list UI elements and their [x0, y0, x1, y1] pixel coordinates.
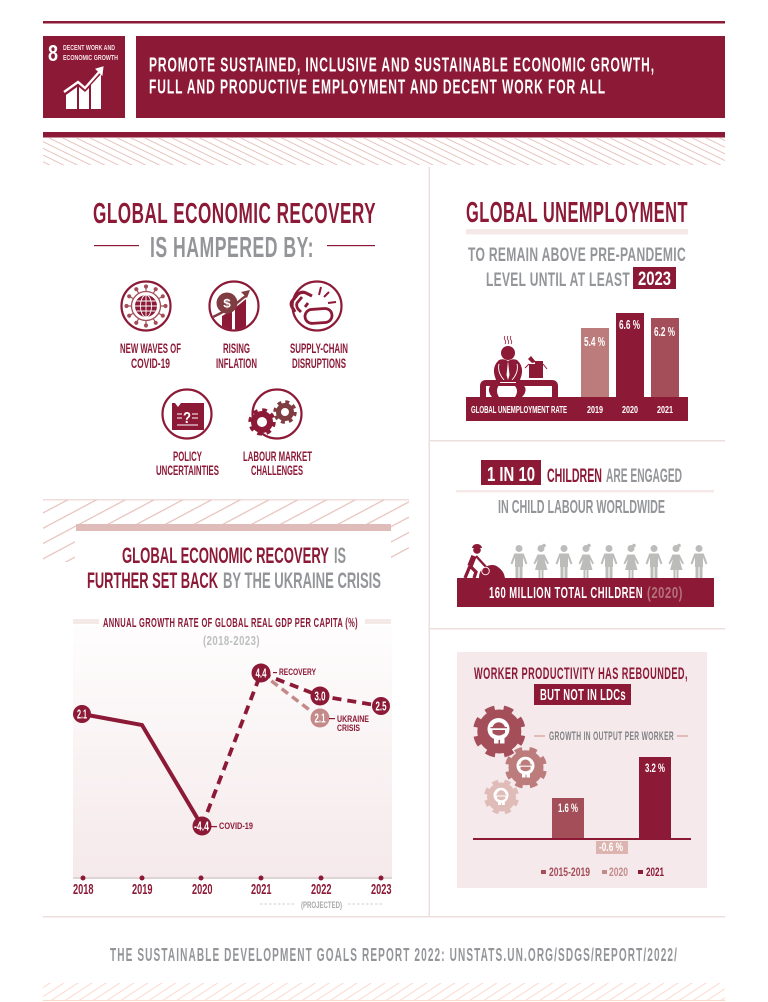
text: unemployment subtitle: 2023	[638, 268, 671, 290]
panel: worker productivity	[457, 652, 707, 888]
label: supply-chain disruptions	[290, 341, 348, 371]
bar chart: output per worker: 3.2 %	[645, 761, 665, 775]
SDG 8 icon: 8	[48, 40, 58, 66]
text: child labour headline: CHILDREN	[547, 466, 602, 487]
goal banner	[136, 36, 725, 118]
data points: 2.1	[77, 708, 87, 722]
data callouts	[211, 667, 369, 831]
line chart: annual growth rate of GDP per capita	[73, 615, 392, 911]
data points: 2.5	[376, 700, 387, 714]
year labels: 2019	[132, 882, 152, 898]
icon: policy uncertainties	[162, 390, 212, 438]
icon: large gear	[472, 704, 527, 759]
label: labour market challenges: LABOUR MARKET	[243, 449, 312, 464]
text: unemployment subtitle	[468, 244, 686, 291]
projected label: (PROJECTED)	[301, 900, 342, 911]
SDG 8 icon: ECONOMIC GROWTH	[63, 55, 118, 62]
icon: labour market challenges	[250, 390, 302, 438]
label: policy uncertainties: POLICY	[173, 449, 202, 464]
heading: further set back: GLOBAL ECONOMIC RECOVERY	[122, 543, 329, 568]
icon: unemployed person on bench	[483, 336, 555, 397]
year labels: 2023	[371, 882, 392, 898]
data callouts: RECOVERY	[279, 667, 316, 677]
callout: but not in LDCs: BUT NOT IN LDCs	[540, 687, 626, 704]
heading: further set back: IS	[334, 543, 346, 568]
heading: further set back: FURTHER SET BACK	[87, 568, 218, 593]
heading: further set back	[87, 543, 381, 593]
axis dots	[80, 876, 384, 880]
bar chart: global unemployment rate: GLOBAL UNEMPLOYMENT RATE	[471, 405, 567, 416]
icon: small gear	[484, 779, 519, 815]
label: labour market challenges	[243, 449, 312, 478]
label: supply-chain disruptions: SUPPLY-CHAIN	[290, 341, 348, 356]
banner: 160 million total children	[457, 578, 714, 607]
heading: global economic recovery: IS HAMPERED BY:	[150, 232, 314, 264]
label: new waves of covid-19: NEW WAVES OF	[120, 341, 181, 356]
label: labour market challenges: CHALLENGES	[251, 463, 303, 478]
data points: 4.4	[256, 666, 267, 680]
legend: 2015-2019	[549, 867, 590, 879]
year labels: 2018	[73, 882, 94, 898]
year labels: 2020	[192, 882, 212, 898]
text: child labour headline: ARE ENGAGED	[606, 466, 682, 487]
subtitle: growth in output per worker: GROWTH IN OUTPUT PER WORKER	[549, 731, 674, 743]
bar chart: global unemployment rate: 2020	[622, 405, 638, 416]
icon: rising inflation	[210, 282, 258, 335]
icon: rising inflation: $	[223, 296, 231, 310]
label: policy uncertainties	[156, 449, 219, 478]
bar chart: global unemployment rate: 2021	[657, 405, 673, 416]
heading: global economic recovery	[93, 198, 376, 264]
icon: row of children	[512, 544, 706, 578]
projected label	[260, 900, 383, 911]
bar chart: global unemployment rate: 6.6 %	[619, 318, 640, 332]
chart title: ANNUAL GROWTH RATE OF GLOBAL REAL GDP PER CAPITA (%)	[103, 615, 358, 630]
label: supply-chain disruptions: DISRUPTIONS	[292, 356, 346, 371]
banner: 160 million total children: (2020)	[647, 585, 683, 602]
data points	[73, 664, 390, 836]
panel: ukraine crisis hatch header	[43, 499, 409, 562]
data callouts: UKRAINE	[337, 714, 369, 724]
icon: supply-chain disruptions	[291, 282, 342, 330]
label: rising inflation: RISING	[223, 341, 250, 356]
data points: -4.4	[194, 820, 209, 834]
year labels: 2022	[311, 882, 332, 898]
icon: policy uncertainties: ?	[183, 410, 191, 427]
bar chart: global unemployment rate	[466, 313, 688, 421]
text: unemployment subtitle: LEVEL UNTIL AT LEAST	[486, 269, 630, 291]
label: policy uncertainties: UNCERTAINTIES	[156, 463, 219, 478]
icon: child worker with sack	[465, 544, 505, 578]
legend: 2021	[646, 867, 664, 879]
data callouts: COVID-19	[219, 821, 253, 831]
label: new waves of covid-19: COVID-19	[131, 356, 170, 371]
year labels: 2021	[251, 882, 272, 898]
legend	[541, 867, 664, 879]
SDG 8 icon	[43, 36, 125, 118]
bar chart: global unemployment rate: 6.2 %	[654, 325, 675, 339]
bar chart: global unemployment rate: 5.4 %	[584, 335, 605, 349]
label: rising inflation	[216, 341, 257, 371]
icon: new waves of covid-19	[122, 282, 170, 330]
label: rising inflation: INFLATION	[216, 356, 257, 371]
callout: but not in LDCs	[534, 684, 631, 705]
icon: medium gear	[504, 746, 548, 789]
SDG 8 icon: DECENT WORK AND	[63, 45, 115, 52]
data points: 2.1	[314, 712, 326, 726]
banner: 160 million total children: 160 MILLION TOTAL CHILDREN	[489, 585, 643, 602]
bar chart: output per worker: -0.6 %	[599, 840, 623, 854]
text: child labour headline: 1 IN 10	[487, 464, 535, 486]
data points: 3.0	[314, 690, 326, 704]
heading: global unemployment	[466, 197, 688, 234]
heading: further set back: BY THE UKRAINE CRISIS	[223, 568, 381, 593]
bar chart: output per worker	[473, 757, 691, 854]
bar chart: global unemployment rate: 2019	[587, 405, 603, 416]
year labels	[73, 882, 392, 898]
bar chart: output per worker: 1.6 %	[558, 801, 578, 815]
text: child labour headline	[456, 460, 714, 517]
data callouts: CRISIS	[337, 723, 360, 733]
legend: 2020	[609, 867, 628, 879]
heading: global economic recovery: GLOBAL ECONOMIC RECOVERY	[93, 198, 376, 230]
label: new waves of covid-19	[120, 341, 181, 371]
chart period: (2018-2023)	[203, 633, 260, 648]
